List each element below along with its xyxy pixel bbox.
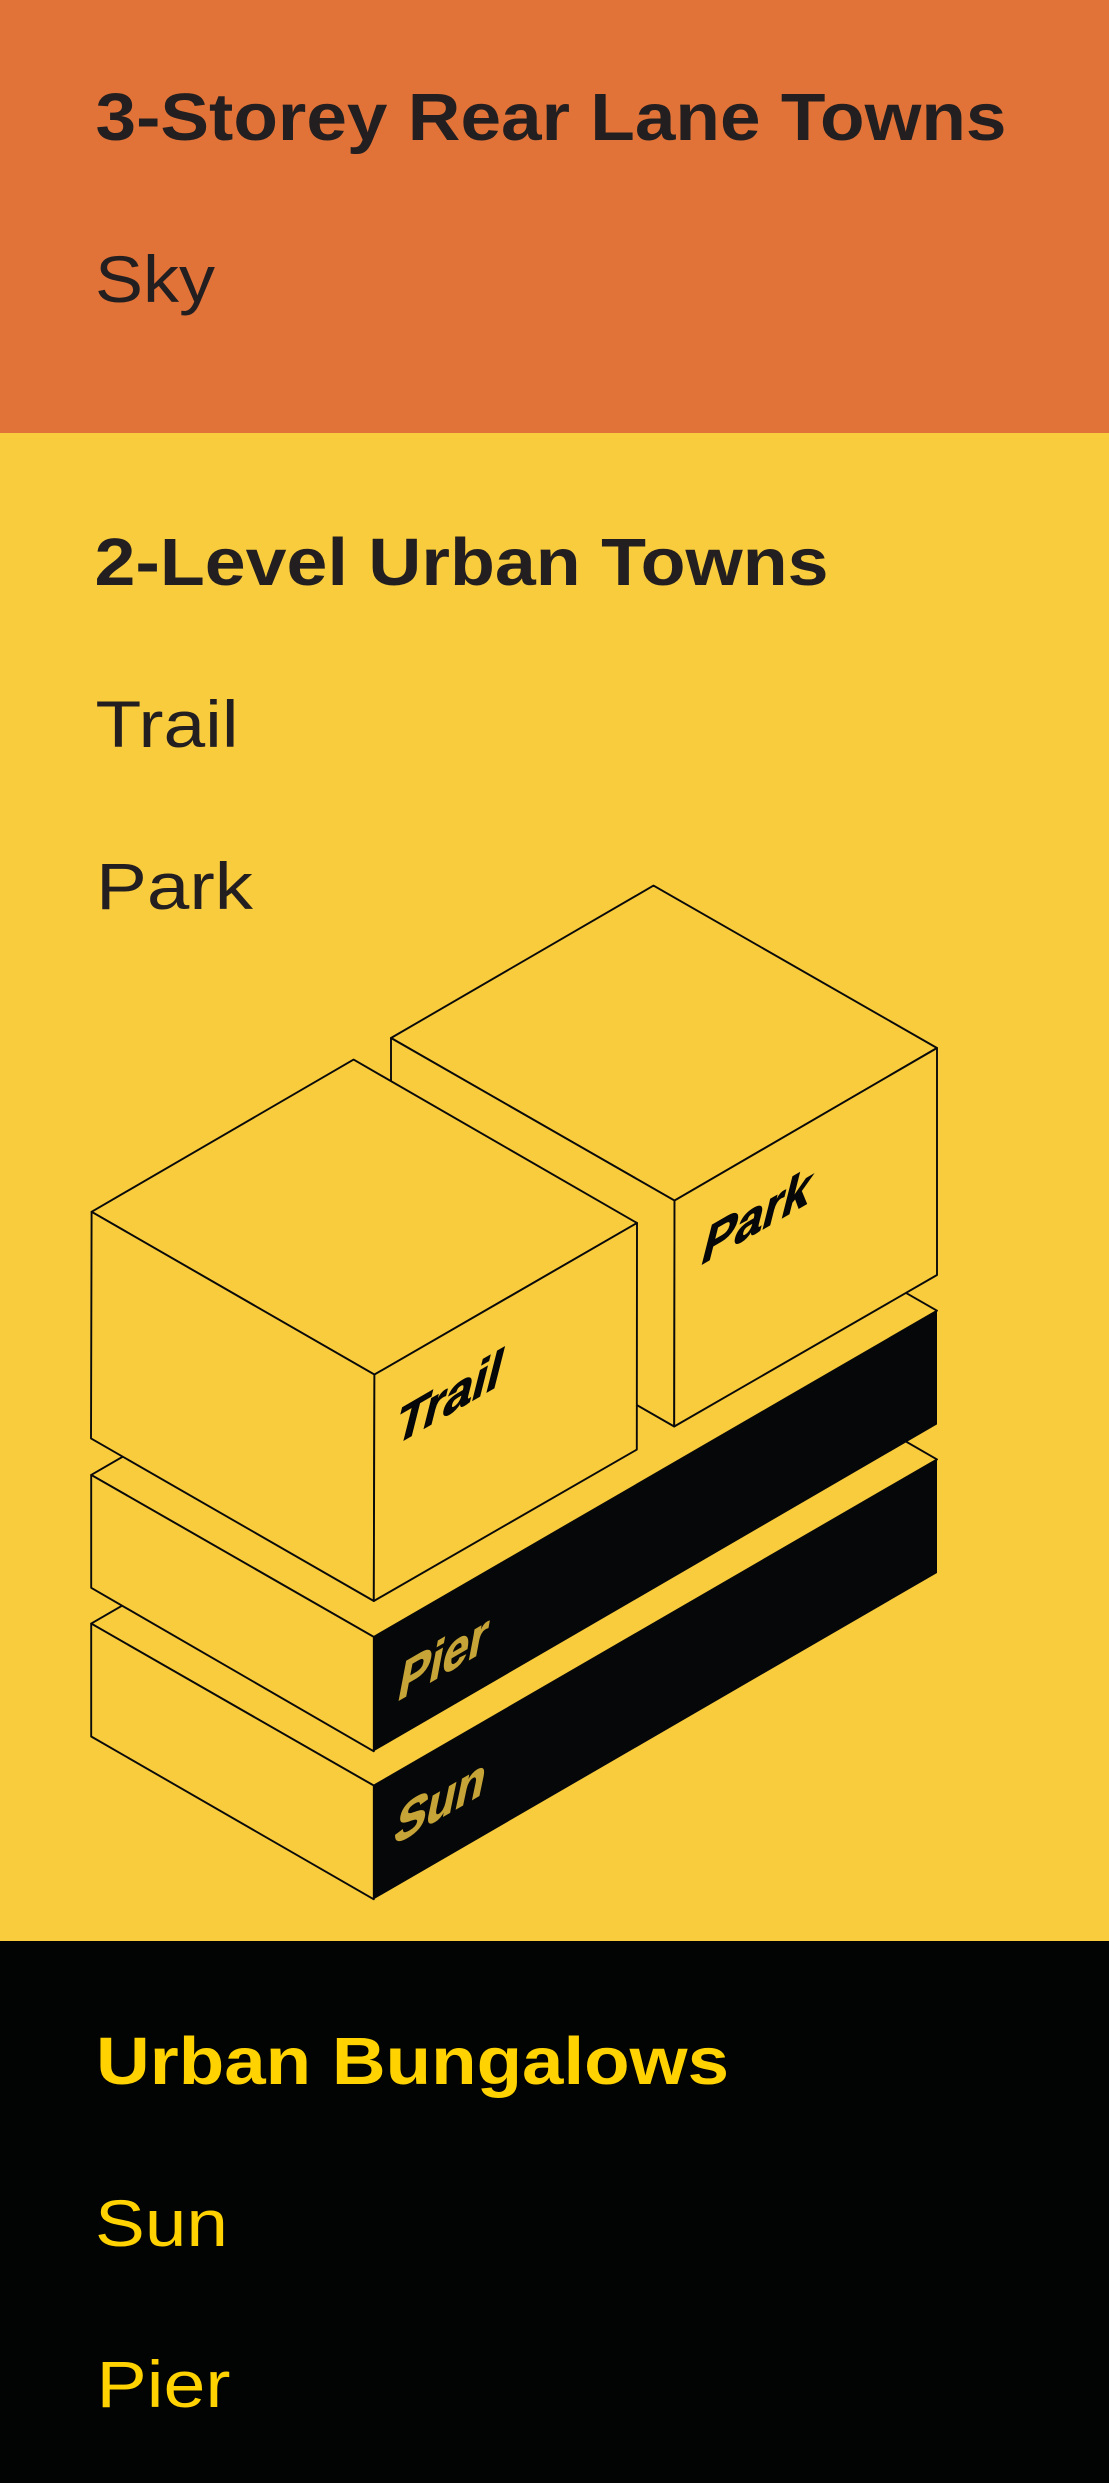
label: Pier: Pier xyxy=(394,1600,494,1715)
slab: Sun xyxy=(91,1297,937,1899)
text: Pier: Pier xyxy=(96,2347,230,2421)
label: Sun: Sun xyxy=(389,1742,493,1859)
text: Sky: Sky xyxy=(95,242,215,316)
heading: 2-Level Urban Towns: 2-Level Urban Towns xyxy=(94,525,829,600)
label: Trail: Trail xyxy=(389,1334,511,1459)
text: Trail: Trail xyxy=(96,687,238,761)
panel: 3-storey rear lane towns xyxy=(0,0,1109,433)
panel: urban bungalows xyxy=(0,1941,1109,2483)
panel: 2-level urban towns xyxy=(0,433,1109,1941)
label: Park: Park xyxy=(696,1152,820,1278)
text: Park: Park xyxy=(96,849,254,923)
isometric building diagram xyxy=(91,886,937,1899)
slab: Pier xyxy=(91,1149,937,1751)
heading: Urban Bungalows: Urban Bungalows xyxy=(96,2024,729,2099)
box: Trail xyxy=(91,1060,637,1601)
heading: 3-Storey Rear Lane Towns: 3-Storey Rear Lane Towns xyxy=(96,80,1007,155)
text: Sun: Sun xyxy=(95,2186,228,2260)
box: Park xyxy=(391,886,937,1426)
